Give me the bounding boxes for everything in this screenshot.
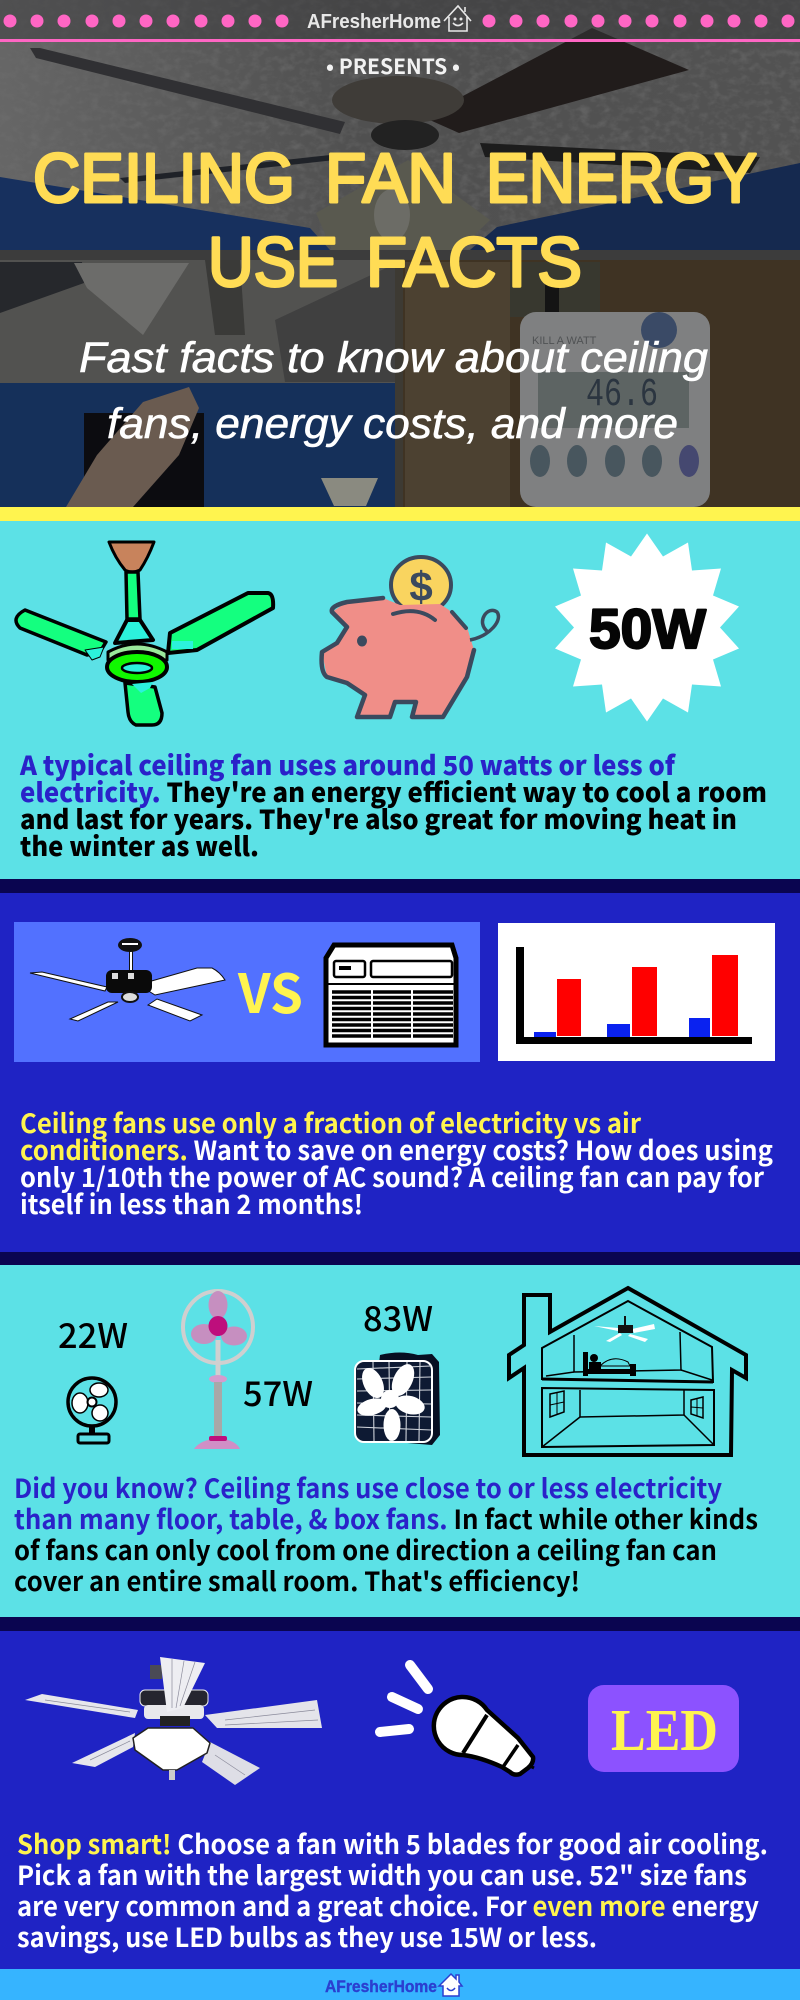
navy divider [0, 1252, 800, 1265]
title: CEILING [33, 139, 295, 217]
VS label: VS [237, 950, 303, 1029]
icon: green ceiling fan [16, 542, 273, 725]
icon: window air conditioner [326, 945, 456, 1045]
subtitle [79, 334, 708, 448]
text block: shop smart: Shop smart! Choose a fan with 5 blades for good air cooling. [17, 1823, 768, 1862]
bed with person [583, 1352, 636, 1376]
title [33, 139, 757, 301]
icon: desk fan [68, 1378, 116, 1443]
text block: fraction of electricity [20, 1102, 773, 1222]
text block: typical ceiling fan: the winter as well. [20, 825, 259, 864]
badge: 50W starburst: 50W [589, 597, 706, 660]
subtitle: fans, energy costs, and more [107, 400, 678, 448]
text block: fraction of electricity: Ceiling fans use only a fraction of electricity vs air [20, 1102, 641, 1141]
label: 83W: 83W [363, 1292, 433, 1341]
panel: shop smart [0, 1631, 800, 1969]
hero panel: photo background [0, 0, 800, 507]
text block: typical ceiling fan: and last for years. They're also great for moving heat in [20, 798, 737, 837]
icon: piggy bank [322, 557, 498, 717]
text block: shop smart [17, 1823, 768, 1955]
title: FAN [325, 139, 456, 217]
yellow divider band [0, 507, 800, 521]
icon: smiling house [444, 6, 471, 31]
subtitle: Fast facts to know about ceiling [79, 334, 708, 382]
logo: AFresherHome footer: AFresherHome [325, 1977, 437, 1996]
icon: stand fan [183, 1291, 253, 1449]
text block: typical ceiling fan: electricity. They're an energy efficient way to cool a room [20, 771, 767, 810]
photo meter reading: 46.6 [586, 373, 658, 418]
footer bar [0, 1969, 800, 2000]
badge: LED: LED [611, 1697, 718, 1763]
navy divider [0, 1617, 800, 1631]
navy divider [0, 879, 800, 893]
text block: did you know [14, 1467, 758, 1599]
icon: box fan [355, 1352, 440, 1445]
text block: fraction of electricity: itself in less than 2 months! [20, 1183, 363, 1222]
comparison box: fan vs air conditioner [14, 922, 480, 1062]
mini ceiling fan [594, 1316, 655, 1342]
text block: shop smart: Pick a fan with the largest width you can use. 52" size fans [17, 1854, 747, 1893]
icon: LED bulb with rays [380, 1665, 534, 1775]
icon: house cross-section with ceiling fan [509, 1288, 746, 1455]
text block: did you know: than many floor, table, & box fans. In fact while other kinds [14, 1498, 758, 1537]
presents label: • PRESENTS • [326, 51, 460, 81]
panel: fan versus AC [0, 893, 800, 1252]
bar chart [498, 923, 775, 1061]
pink dots row [0, 14, 800, 42]
text block: did you know: Did you know? Ceiling fans use close to or less electricity [14, 1467, 722, 1506]
text block: typical ceiling fan: A typical ceiling fan uses around 50 watts or less of [19, 744, 676, 783]
icon: black and white ceiling fan [30, 938, 225, 1021]
badge: LED [588, 1685, 739, 1772]
text block: fraction of electricity: only 1/10th the power of AC sound? A ceiling fan can pay for [20, 1156, 764, 1195]
text block: shop smart: savings, use LED bulbs as they use 15W or less. [17, 1916, 597, 1955]
dollar sign: $ [409, 563, 433, 610]
label: 57W: 57W [243, 1367, 313, 1416]
icon: five blade fan with light [25, 1657, 322, 1785]
text block: fraction of electricity: conditioners. Want to save on energy costs? How does using [20, 1129, 773, 1168]
badge: 50W starburst [555, 534, 739, 722]
label: 22W: 22W [58, 1309, 128, 1358]
photo meter brand: KILL A WATT [532, 335, 597, 347]
panel: 50 watts [0, 521, 800, 879]
panel: other fan types [0, 1265, 800, 1617]
title: USE [208, 223, 338, 301]
logo: AFresherHome top: AFresherHome [307, 11, 441, 33]
text block: did you know: cover an entire small room. That's efficiency! [14, 1560, 580, 1599]
text block: shop smart: are very common and a great choice. For even more energy [17, 1885, 759, 1924]
text block: did you know: of fans can only cool from one direction a ceiling fan can [14, 1529, 717, 1568]
title: ENERGY [486, 139, 757, 217]
text block: typical ceiling fan [19, 744, 767, 864]
title: FACTS [366, 223, 582, 301]
